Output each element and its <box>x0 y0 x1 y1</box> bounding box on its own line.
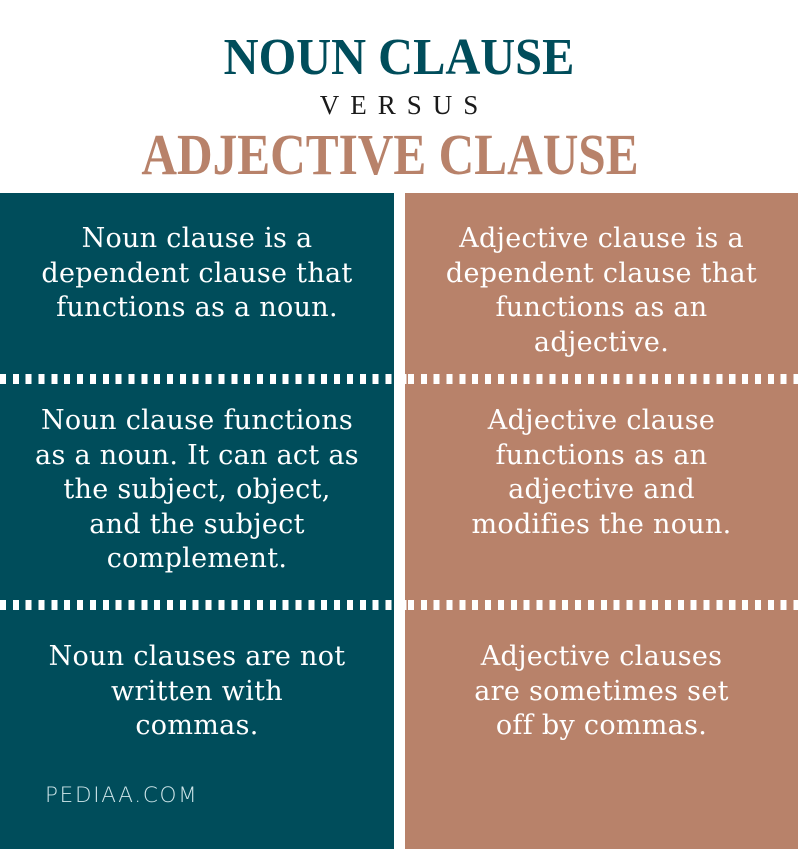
text: definition <box>41 223 353 323</box>
text: definition: Adjective clause is a <box>459 223 744 254</box>
text: definition: functions as a noun. <box>56 292 338 323</box>
text: commas <box>49 641 345 741</box>
text: function: the subject, object, <box>63 474 331 505</box>
text: definition: functions as an <box>496 292 707 323</box>
text: function <box>35 405 359 574</box>
text: definition: dependent clause that <box>41 258 353 288</box>
text: function: functions as an <box>496 440 707 470</box>
text: function: as a noun. It can act as <box>35 440 359 470</box>
title: noun clause: NOUN CLAUSE <box>224 29 574 86</box>
logo: pediaa.com: PEDIAA.COM <box>45 783 198 808</box>
text: function: Noun clause functions <box>41 405 353 436</box>
text: commas: off by commas. <box>496 710 707 741</box>
text: function: adjective and <box>508 474 695 505</box>
text: definition <box>446 223 757 358</box>
text: commas: written with <box>111 676 283 706</box>
text: commas: are sometimes set <box>474 676 729 706</box>
text: function: and the subject <box>89 508 305 540</box>
text: function: Adjective clause <box>488 405 715 436</box>
panel: noun clause <box>0 193 394 849</box>
text: definition: Noun clause is a <box>82 223 312 254</box>
text: definition: adjective. <box>534 326 669 358</box>
text: commas <box>474 641 729 741</box>
text: commas: Noun clauses are not <box>49 641 345 672</box>
title: adjective clause: ADJECTIVE CLAUSE <box>141 122 639 187</box>
subtitle: versus: VERSUS <box>320 90 489 120</box>
text: function: modifies the noun. <box>471 508 732 540</box>
panel: adjective clause <box>405 193 798 849</box>
text: function <box>471 405 732 540</box>
text: definition: dependent clause that <box>446 258 757 288</box>
text: function: complement. <box>107 543 287 574</box>
text: commas: commas. <box>135 710 259 741</box>
text: commas: Adjective clauses <box>481 641 722 672</box>
